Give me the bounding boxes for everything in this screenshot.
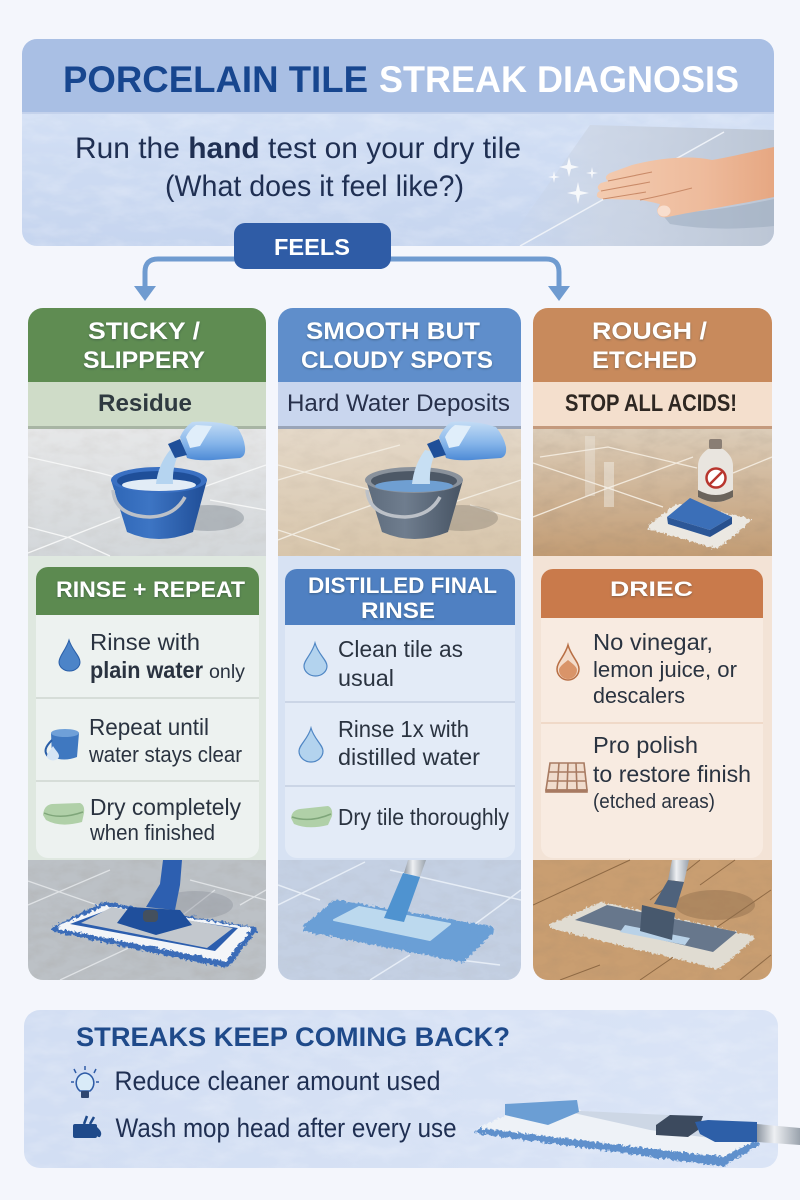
column heading: SMOOTH BUT <box>306 318 480 345</box>
icon: light bulb <box>71 1066 99 1098</box>
step: no acids: lemon juice, or <box>593 657 737 682</box>
column heading <box>83 318 205 374</box>
column heading: STICKY / <box>88 318 200 345</box>
icon: small bucket <box>46 729 79 760</box>
panel: streaks keep coming back <box>24 1010 800 1168</box>
step: no acids: descalers <box>593 683 685 708</box>
step: dry completely <box>89 794 241 845</box>
panel: rough / etched column <box>533 308 772 980</box>
column heading <box>592 318 707 374</box>
panel: dried steps <box>541 569 763 858</box>
illustration: grey mop on wood floor <box>533 860 772 980</box>
icon: wash bucket with brushes <box>73 1116 101 1138</box>
column heading: CLOUDY SPOTS <box>301 347 493 374</box>
diagnosis: hard water deposits: Hard Water Deposits <box>287 390 510 417</box>
illustration: light blue mop on blue tile <box>278 860 521 980</box>
panel heading: RINSE <box>361 598 435 623</box>
column heading <box>301 318 493 374</box>
title: STREAK DIAGNOSIS <box>379 59 739 100</box>
icon: folded towel <box>291 806 332 827</box>
step: clean tile <box>338 636 463 691</box>
step: dry completely: when finished <box>89 820 215 845</box>
icon: water drop <box>59 640 80 671</box>
step: clean tile: Clean tile as <box>338 636 463 662</box>
panel: rinse + repeat <box>36 567 259 858</box>
column heading: ROUGH / <box>592 318 707 345</box>
panel heading <box>308 573 497 623</box>
hand test prompt: Run the hand test on your dry tile <box>75 132 521 165</box>
column heading: ETCHED <box>592 347 697 374</box>
panel heading: DRIEC <box>610 578 693 601</box>
step: rinse with plain water: only <box>209 662 246 683</box>
step: repeat until clear: water stays clear <box>88 742 242 767</box>
icon: tile grid <box>546 763 587 792</box>
title: PORCELAIN TILE <box>63 59 368 100</box>
column heading: SLIPPERY <box>83 347 205 374</box>
step: pro polish: to restore finish <box>593 761 751 787</box>
step: rinse with distilled water: distilled water <box>338 744 480 770</box>
step: rinse with distilled water: Rinse 1x with <box>338 716 469 742</box>
panel: sticky / slippery column <box>28 308 266 980</box>
icon: folded towel <box>43 803 84 825</box>
step: repeat until clear <box>88 714 242 767</box>
step: dry completely: Dry completely <box>90 794 241 820</box>
illustration: blue bucket with pouring bottle <box>111 422 245 539</box>
illustration: acid bottle and scrub pad <box>650 439 749 547</box>
step: pro polish: Pro polish <box>593 732 698 758</box>
illustration: blue mop on grey tile <box>28 860 266 980</box>
panel: smooth but cloudy spots column <box>278 308 521 980</box>
icon: water drop <box>299 728 323 762</box>
FEELS button <box>234 223 391 269</box>
panel: distilled final rinse <box>285 569 515 858</box>
panel: title and hand test <box>22 39 774 246</box>
hand test prompt <box>75 132 521 203</box>
icon: sparkles <box>548 157 598 204</box>
icon: hand on tile <box>597 147 774 229</box>
step: dry tile: Dry tile thoroughly <box>338 804 509 830</box>
step: pro polish <box>593 732 751 813</box>
title <box>63 59 739 100</box>
FEELS button: FEELS <box>274 234 350 260</box>
icon: acid drop <box>557 645 579 680</box>
step: no acids: No vinegar, <box>593 629 713 655</box>
warning: stop all acids: STOP ALL ACIDS! <box>565 390 737 417</box>
panel heading: DISTILLED FINAL <box>308 573 497 598</box>
panel heading: RINSE + REPEAT <box>56 577 246 602</box>
step: rinse with plain water: plain water <box>90 657 203 683</box>
illustration: mop lying flat <box>477 1100 800 1165</box>
tip: reduce cleaner: Reduce cleaner amount used <box>114 1066 440 1096</box>
step: pro polish: (etched areas) <box>593 791 715 813</box>
heading: STREAKS KEEP COMING BACK? <box>76 1022 510 1052</box>
step: clean tile: usual <box>338 665 394 691</box>
step: rinse with plain water: Rinse with <box>90 629 200 655</box>
step: repeat until clear: Repeat until <box>89 714 209 740</box>
tip: wash mop head: Wash mop head after every use <box>116 1113 456 1143</box>
diagnosis: residue: Residue <box>98 390 192 417</box>
arrows from FEELS <box>134 259 570 301</box>
illustration: grey bucket with pouring bottle <box>365 422 506 539</box>
step: no acids <box>593 629 737 708</box>
step: rinse with distilled water <box>338 716 480 770</box>
hand test prompt: (What does it feel like?) <box>165 170 464 203</box>
icon: water drop <box>304 643 327 676</box>
step: rinse with plain water <box>90 629 246 683</box>
